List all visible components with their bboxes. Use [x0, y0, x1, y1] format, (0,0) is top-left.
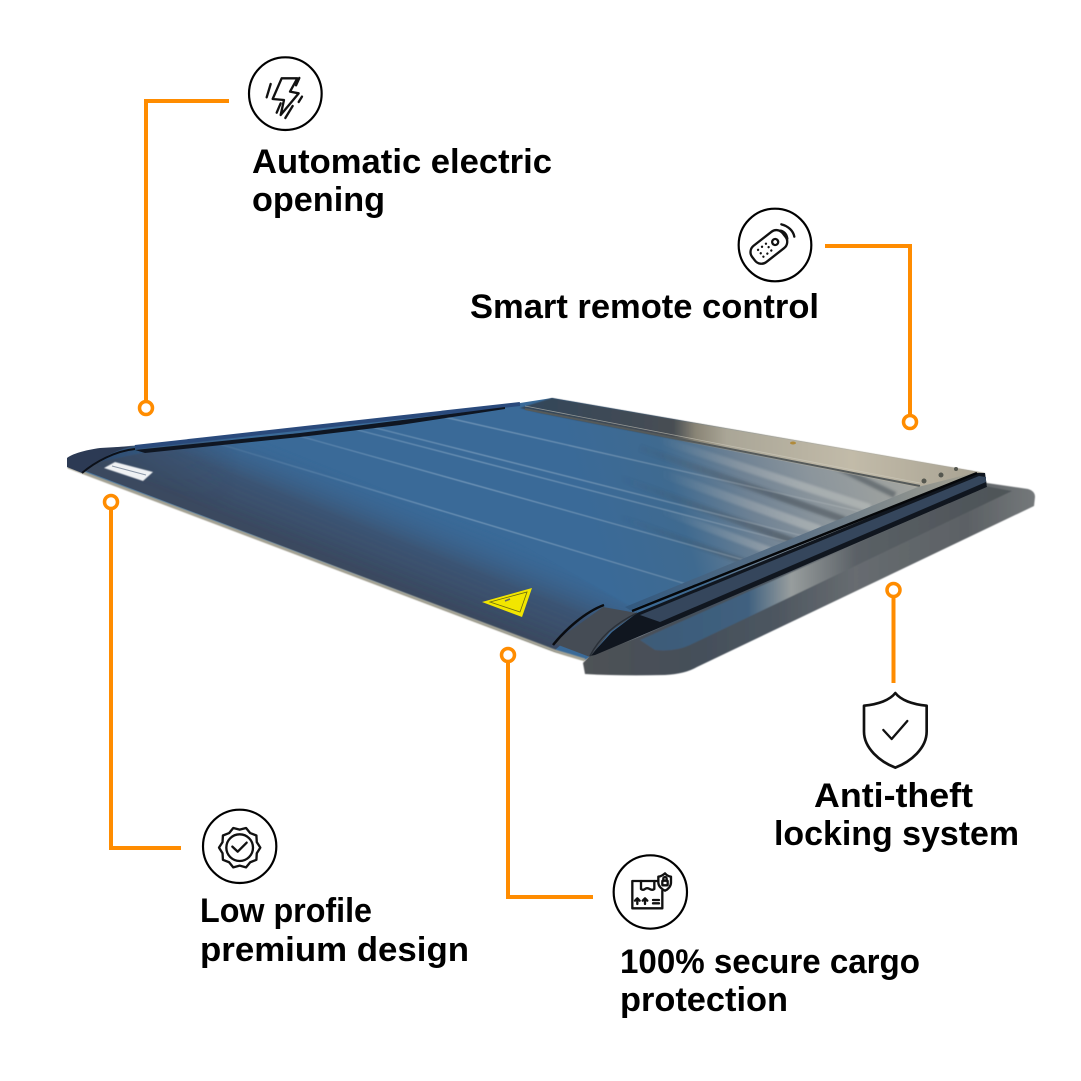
- tonneau cover product photo: [60, 398, 1035, 675]
- label: low profile premium design: premium design: [200, 931, 469, 969]
- icon: lightning bolt: [249, 57, 322, 130]
- label: 100% secure cargo protection: 100% secure cargo: [620, 943, 920, 981]
- connector: cargo protection: [502, 648, 593, 897]
- connector: automatic electric opening: [140, 101, 229, 414]
- front edge trim: [68, 467, 585, 660]
- label: anti-theft locking system: Anti-theft: [814, 777, 973, 815]
- left end cap: [67, 446, 135, 473]
- connector: smart remote control: [825, 246, 916, 428]
- rail end cap: [553, 605, 637, 657]
- slats: [60, 417, 895, 655]
- icon: quality badge: [203, 810, 276, 883]
- connector: low profile design: [104, 496, 181, 848]
- lower tailgate plate: [583, 482, 1035, 675]
- label: 100% secure cargo protection: protection: [620, 981, 788, 1019]
- label: smart remote control: Smart remote control: [470, 288, 819, 326]
- warning triangle sticker: [482, 588, 532, 617]
- rail inner strip: [625, 472, 977, 610]
- rear header bar: [520, 398, 985, 487]
- label: automatic electric opening: opening: [252, 181, 385, 219]
- label: anti-theft locking system: locking system: [774, 815, 1019, 853]
- logo: [104, 462, 153, 481]
- connector: anti-theft locking: [887, 584, 900, 683]
- label: automatic electric opening: Automatic electric: [252, 143, 552, 181]
- black rail: [590, 473, 987, 656]
- main cover surface: [67, 398, 987, 660]
- top weather seal: [135, 404, 520, 453]
- icon: secure cargo box: [614, 855, 687, 929]
- icon: remote control: [739, 209, 811, 281]
- screws: [790, 442, 958, 484]
- label: low profile premium design: Low profile: [200, 892, 372, 930]
- icon: shield with check: [864, 693, 927, 768]
